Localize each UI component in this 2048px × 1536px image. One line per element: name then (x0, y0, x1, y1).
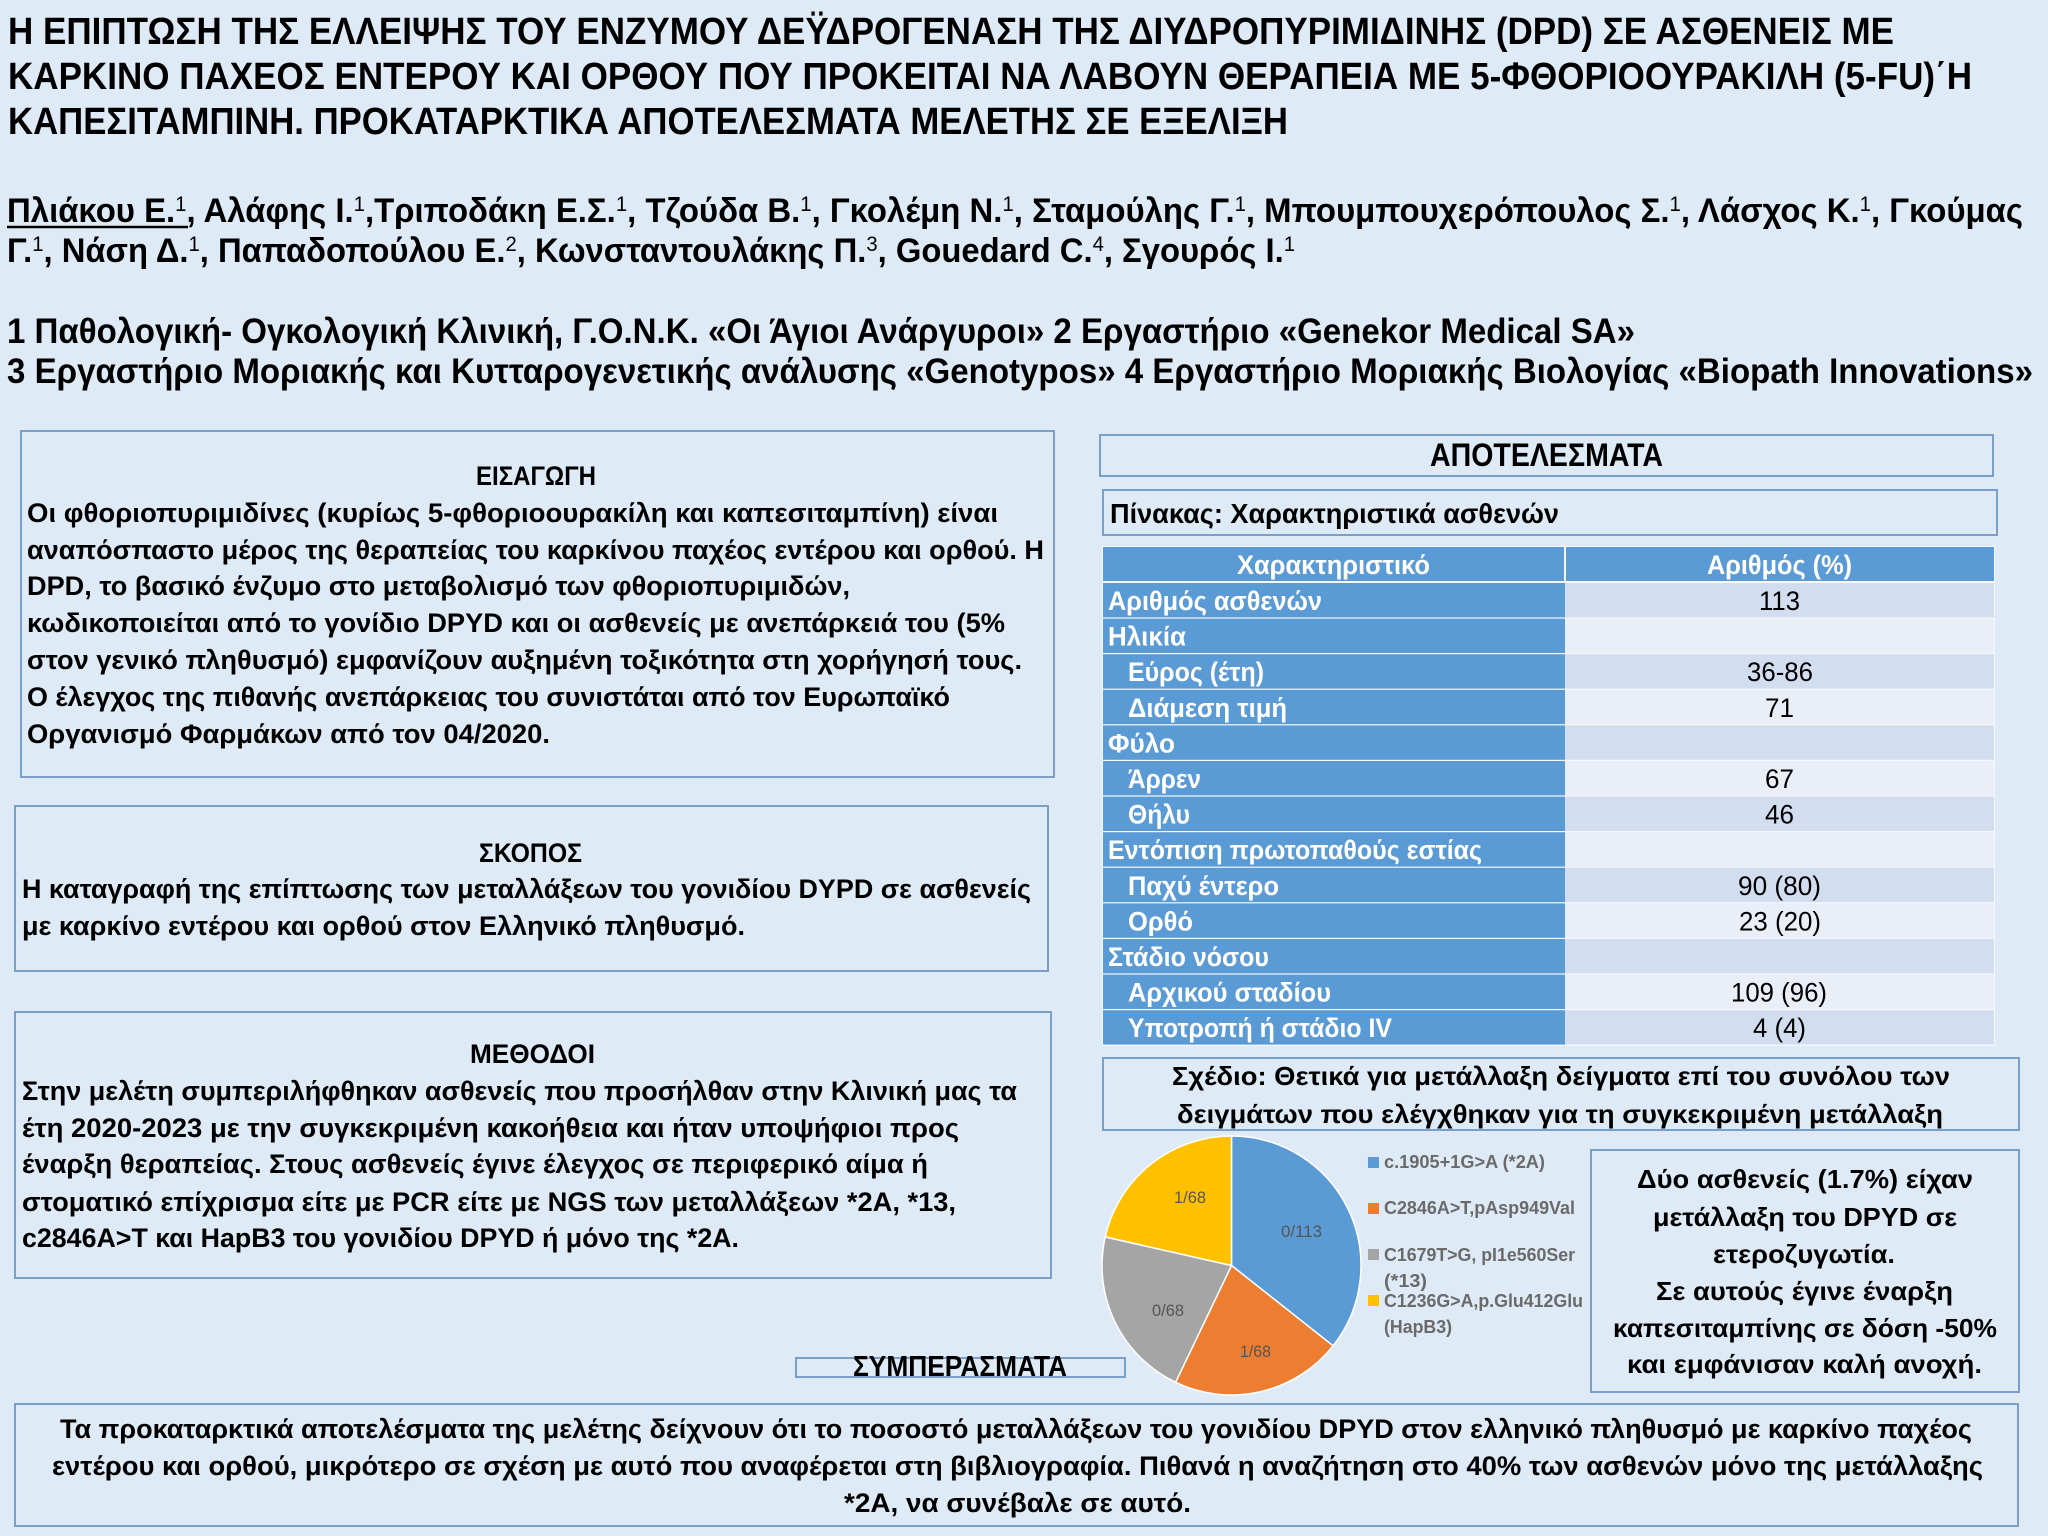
table caption: Πίνακας: Χαρακτηριστικά ασθενών (1110, 498, 1559, 529)
chart caption (1103, 1058, 2019, 1130)
title: Η ΕΠΙΠΤΩΣΗ ΤΗΣ ΕΛΛΕΙΨΗΣ ΤΟΥ ΕΝΖΥΜΟΥ ΔΕΫΔΡΟΓΕΝΑΣΗ ΤΗΣ ΔΙΥΔΡΟΠΥΡΙΜΙΔΙΝΗΣ (DPD) ΣΕ ΑΣΘΕΝΕΙΣ ΜΕ (8, 10, 1894, 53)
chart caption: δειγμάτων που ελέγχθηκαν για τη συγκεκριμένη μετάλλαξη (1177, 1099, 1943, 1129)
authors: , Σγουρός Ι. (1104, 232, 1284, 270)
table: patient characteristics: Ορθό (1128, 906, 1193, 936)
chart legend: (HapB3) (1384, 1317, 1452, 1337)
authors: 1 (32, 233, 43, 256)
chart legend: C1679T>G, pI1e560Ser (1384, 1245, 1575, 1265)
authors: 1 (1670, 193, 1681, 216)
panel: introduction: ΕΙΣΑΓΩΓΗ (476, 461, 596, 491)
affiliations (7, 312, 2033, 391)
chart legend (1368, 1152, 1583, 1337)
authors: 1 (1235, 193, 1246, 216)
table: patient characteristics: Χαρακτηριστικό (1237, 550, 1430, 580)
table caption (1103, 490, 1997, 535)
authors: 1 (1284, 233, 1295, 256)
table: patient characteristics (1102, 546, 1995, 1046)
panel: methods: c2846A>T και HapB3 του γονιδίου DPYD ή μόνο της *2A. (22, 1223, 739, 1253)
table: patient characteristics: Εντόπιση πρωτοπαθούς εστίας (1108, 835, 1482, 865)
authors: , Γκούμας (1871, 192, 2023, 230)
authors: , Νάση Δ. (43, 232, 189, 270)
authors: , Σταμούλης Γ. (1014, 192, 1235, 230)
authors: , Τζούδα Β. (627, 192, 800, 230)
authors: 4 (1093, 233, 1104, 256)
panel: introduction: Ο έλεγχος της πιθανής ανεπάρκειας του συνιστάται από τον Ευρωπαϊκό (27, 682, 950, 712)
authors: 1 (800, 193, 812, 216)
authors: 2 (505, 233, 517, 256)
table: patient characteristics: Φύλο (1108, 728, 1175, 758)
authors: , Λάσχος Κ. (1681, 192, 1860, 230)
authors: 3 (866, 233, 878, 256)
authors: Γ. (7, 232, 33, 270)
chart legend: C2846A>T,pAsp949Val (1384, 1198, 1575, 1218)
table: patient characteristics: 109 (96) (1731, 978, 1827, 1008)
panel: aim: με καρκίνο εντέρου και ορθού στον Ελληνικό πληθυσμό. (22, 911, 745, 941)
chart legend: c.1905+1G>A (*2A) (1384, 1152, 1545, 1172)
table: patient characteristics: Αριθμός ασθενών (1108, 586, 1322, 616)
panel: methods (15, 1012, 1051, 1278)
table: patient characteristics: Διάμεση τιμή (1128, 693, 1287, 723)
callout: two patients: Σε αυτούς έγινε έναρξη (1656, 1276, 1953, 1306)
panel: introduction: DPD, το βασικό ένζυμο στο μεταβολισμό των φθοριοπυριμιδών, (27, 571, 850, 601)
panel: aim: Η καταγραφή της επίπτωσης των μεταλλάξεων του γονιδίου DYPD σε ασθενείς (22, 874, 1031, 904)
callout: two patients: Δύο ασθενείς (1.7%) είχαν (1637, 1164, 1973, 1194)
authors: 1 (175, 193, 186, 216)
callout: two patients: και εμφάνισαν καλή ανοχή. (1627, 1349, 1982, 1379)
authors: 1 (1860, 193, 1871, 216)
table: patient characteristics: 36-86 (1747, 657, 1813, 687)
authors: ,Τριποδάκη Ε.Σ. (365, 192, 616, 230)
authors: 1 (189, 233, 200, 256)
table: patient characteristics: Αριθμός (%) (1707, 550, 1852, 580)
panel: methods: έτη 2020-2023 με την συγκεκριμένη κακοήθεια και ήταν υποψήφιοι προς (22, 1113, 959, 1143)
results heading: ΑΠΟΤΕΛΕΣΜΑΤΑ (1430, 437, 1663, 473)
panel: methods: Στην μελέτη συμπεριλήφθηκαν ασθενείς που προσήλθαν στην Κλινική μας τα (22, 1076, 1017, 1106)
table: patient characteristics: Εύρος (έτη) (1128, 657, 1264, 687)
table: patient characteristics: Θήλυ (1128, 800, 1190, 830)
table: patient characteristics: 71 (1765, 693, 1794, 723)
pie chart: mutation-positive samples: 0/113 (1281, 1222, 1322, 1241)
panel: conclusions (15, 1404, 2018, 1526)
callout: two patients: ετεροζυγωτία. (1713, 1239, 1895, 1269)
table: patient characteristics: 46 (1765, 800, 1794, 830)
panel: methods: ΜΕΘΟΔΟΙ (470, 1039, 595, 1069)
table: patient characteristics: 90 (80) (1738, 871, 1821, 901)
authors: , Μπουμπουχερόπουλος Σ. (1246, 192, 1670, 230)
panel: introduction (21, 431, 1054, 777)
authors: Πλιάκου Ε. (7, 192, 181, 230)
table: patient characteristics: Άρρεν (1128, 764, 1201, 794)
table: patient characteristics: Στάδιο νόσου (1108, 942, 1269, 972)
affiliations: 1 Παθολογική- Ογκολογική Κλινική, Γ.Ο.Ν.Κ. «Οι Άγιοι Ανάργυροι» 2 Εργαστήριο «Genekor Medical SA» (7, 312, 1635, 351)
panel: introduction: Οι φθοριοπυριμιδίνες (κυρίως 5-φθοριοουρακίλη και καπεσιταμπίνη) είναι (27, 498, 998, 528)
table: patient characteristics: Αρχικού σταδίου (1128, 978, 1331, 1008)
panel: methods: στοματικό επίχρισμα είτε με PCR είτε με NGS των μεταλλάξεων *2A, *13, (22, 1187, 956, 1217)
panel: methods: έναρξη θεραπείας. Στους ασθενείς έγινε έλεγχος σε περιφερικό αίμα ή (22, 1149, 928, 1179)
authors: 1 (616, 193, 627, 216)
pie chart: mutation-positive samples: 0/68 (1152, 1301, 1184, 1320)
chart legend: C1236G>A,p.Glu412Glu (1384, 1291, 1583, 1311)
panel: conclusions: Τα προκαταρκτικά αποτελέσματα της μελέτης δείχνουν ότι το ποσοστό μεταλλάξεων του γονιδίου DPYD στον ελληνικό πληθυσμό με καρκίνο παχέος (60, 1414, 1972, 1444)
callout: two patients: καπεσιταμπίνης σε δόση -50% (1613, 1313, 1997, 1343)
pie chart: mutation-positive samples: 1/68 (1174, 1188, 1206, 1207)
table: patient characteristics: 23 (20) (1739, 906, 1821, 936)
results heading (1100, 435, 1993, 476)
panel: introduction: κωδικοποιείται από το γονίδιο DPYD και οι ασθενείς με ανεπάρκειά του (5% (27, 608, 1005, 638)
panel: introduction: στον γενικό πληθυσμό) εμφανίζουν αυξημένη τοξικότητα στη χορήγησή τους. (27, 645, 1022, 675)
authors: , Gouedard C. (878, 232, 1093, 270)
table: patient characteristics: 67 (1765, 764, 1794, 794)
table: patient characteristics: Ηλικία (1108, 622, 1186, 652)
table: patient characteristics: Παχύ έντερο (1128, 871, 1279, 901)
title (8, 10, 1972, 143)
chart caption: Σχέδιο: Θετικά για μετάλλαξη δείγματα επί του συνόλου των (1172, 1061, 1950, 1091)
panel: introduction: Οργανισμό Φαρμάκων από τον 04/2020. (27, 719, 550, 749)
pie chart: mutation-positive samples: 1/68 (1240, 1342, 1271, 1361)
authors: 1 (1002, 193, 1014, 216)
authors: , Αλάφης Ι. (186, 192, 354, 230)
title: ΚΑΠΕΣΙΤΑΜΠΙΝΗ. ΠΡΟΚΑΤΑΡΚΤΙΚΑ ΑΠΟΤΕΛΕΣΜΑΤΑ ΜΕΛΕΤΗΣ ΣΕ ΕΞΕΛΙΞΗ (8, 101, 1288, 143)
panel: aim: ΣΚΟΠΟΣ (479, 838, 582, 868)
pie chart: mutation-positive samples (1102, 1136, 1361, 1395)
conclusions heading: ΣΥΜΠΕΡΑΣΜΑΤΑ (853, 1351, 1067, 1383)
authors: 1 (354, 193, 365, 216)
panel: aim (15, 806, 1048, 971)
callout: two patients: μετάλλαξη του DPYD σε (1653, 1202, 1957, 1232)
table: patient characteristics: 4 (4) (1753, 1013, 1806, 1043)
table: patient characteristics: Υποτροπή ή στάδιο IV (1128, 1013, 1392, 1043)
panel: conclusions: εντέρου και ορθού, μικρότερο σε σχέση με αυτό που αναφέρεται στη βιβλιογραφία. Πιθανά η αναζήτηση στο 40% των ασθενών μόνο της μετάλλαξης (52, 1451, 1983, 1481)
authors: , Παπαδοπούλου Ε. (200, 232, 505, 270)
chart legend: (*13) (1384, 1271, 1427, 1291)
panel: introduction: αναπόσπαστο μέρος της θεραπείας του καρκίνου παχέος εντέρου και ορθού. Η (27, 535, 1044, 565)
callout: two patients (1591, 1150, 2019, 1392)
authors (7, 192, 2023, 270)
panel: conclusions: *2Α, να συνέβαλε σε αυτό. (844, 1488, 1191, 1518)
authors: , Γκολέμη Ν. (812, 192, 1002, 230)
authors: , Κωνσταντουλάκης Π. (517, 232, 866, 270)
table: patient characteristics: 113 (1759, 586, 1800, 616)
